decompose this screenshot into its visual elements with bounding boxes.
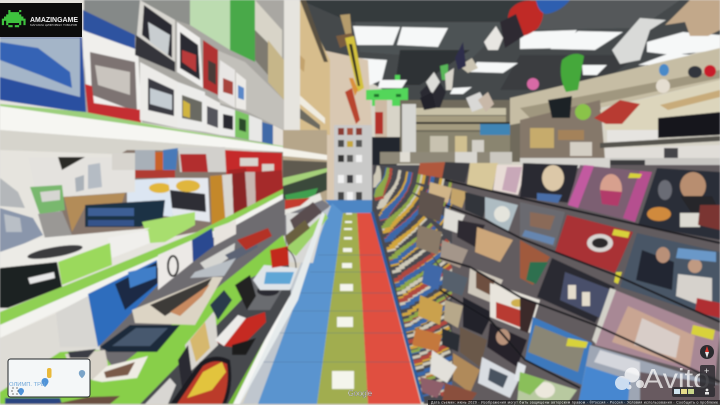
avito: dots xyxy=(615,368,644,390)
plush: cream xyxy=(445,68,454,90)
box: red set xyxy=(178,147,228,172)
cardboard box xyxy=(64,193,125,232)
minimap: pin 3 xyxy=(18,388,24,396)
white panel xyxy=(56,296,97,347)
dark blue boxes xyxy=(85,200,165,227)
cover: red rap xyxy=(555,215,633,273)
cover: bottom silver xyxy=(578,345,720,404)
barcode box xyxy=(108,230,150,258)
green invader sign xyxy=(366,75,408,106)
blue console box xyxy=(88,260,158,347)
floor level xyxy=(236,200,421,404)
plush: green yellow ball xyxy=(575,104,591,120)
plush: black hat xyxy=(688,66,702,78)
box: controller small xyxy=(218,60,235,108)
black box xyxy=(0,262,62,308)
top back boxes xyxy=(84,0,140,40)
end cap and green lower shelf xyxy=(226,212,328,404)
plush: pink xyxy=(527,78,539,90)
white blue box xyxy=(253,265,298,290)
floor: grey base xyxy=(236,205,332,404)
box: console mario xyxy=(127,178,173,217)
plush: grey figure xyxy=(459,58,478,73)
cover: dark navy xyxy=(537,258,615,323)
plush: dark bundle xyxy=(548,96,572,118)
attribution bar xyxy=(428,400,720,405)
controller pack xyxy=(0,208,43,252)
lower wall xyxy=(0,300,100,392)
plush: green small xyxy=(440,64,448,80)
floor: red strip xyxy=(357,213,421,404)
controls: thumbnails xyxy=(674,389,694,394)
dense narrow covers xyxy=(372,165,452,404)
plush: red small xyxy=(704,65,716,77)
right upper wall xyxy=(510,48,720,168)
box: controller dark xyxy=(205,95,220,135)
second level products xyxy=(0,147,285,308)
controls: plus: + xyxy=(704,366,709,376)
lower shelf products xyxy=(5,202,322,404)
shelf lines on disc wall xyxy=(440,180,720,388)
top shelf boxes xyxy=(0,0,284,147)
green item xyxy=(30,185,65,215)
green strip items xyxy=(210,290,232,320)
cover: blonde woman xyxy=(520,163,578,203)
plush: white cat xyxy=(656,79,670,93)
floor: tile seams xyxy=(262,255,420,362)
plush: white cluster xyxy=(466,92,488,112)
logo: wordmark: AMAZINGAME xyxy=(30,15,78,24)
logo: green invader xyxy=(2,10,26,27)
dark book xyxy=(100,325,180,352)
box: green xyxy=(235,110,249,140)
large covers xyxy=(517,163,720,404)
logo: tagline: МАГАЗИН ЦИФРОВЫХ ТОВАРОВ xyxy=(30,23,77,27)
box: red cluster xyxy=(225,150,282,205)
plush: red monster xyxy=(508,1,543,36)
cover: pink lady xyxy=(567,165,652,222)
emblem shield xyxy=(170,356,231,404)
box: white controller 2 xyxy=(140,62,178,128)
wall items on back xyxy=(290,202,322,234)
controls: layer panel xyxy=(672,387,715,397)
plush: green turtle xyxy=(561,54,584,92)
back pegboard with merchandise xyxy=(334,125,372,201)
plush: dark hanging xyxy=(455,42,466,70)
cover: dark cast xyxy=(520,202,565,247)
plush: dark bottom xyxy=(420,92,436,110)
minimap xyxy=(8,359,90,397)
floor: green strip xyxy=(317,213,368,404)
ceiling lights xyxy=(353,26,720,94)
box: red controller small xyxy=(177,22,203,88)
second level backdrop xyxy=(60,150,285,250)
wall base blue line xyxy=(372,212,423,402)
blue box behind xyxy=(192,228,214,262)
red device xyxy=(270,246,289,268)
controls: person xyxy=(705,389,709,394)
cover: mauve xyxy=(592,288,720,377)
minimap: pin 2 xyxy=(79,370,85,378)
cover: green white xyxy=(517,372,577,404)
controls: compass xyxy=(700,345,714,359)
tan box xyxy=(132,277,223,325)
cover: colourful left xyxy=(520,240,550,285)
minimap: pegman xyxy=(47,368,52,378)
green side box xyxy=(58,243,112,285)
sword decoration xyxy=(336,14,364,124)
ceiling xyxy=(305,0,720,101)
box: controller yellow xyxy=(178,82,205,132)
white o box xyxy=(158,240,193,290)
white flat box xyxy=(0,228,150,272)
back wall cream xyxy=(322,50,372,205)
cover: small red xyxy=(520,297,537,333)
pale green box xyxy=(142,212,195,243)
avito: wordmark: Avito xyxy=(643,363,710,394)
disc wall base xyxy=(372,165,720,404)
minimap: place label: ОЛИМП. ТРЦ xyxy=(9,382,46,388)
floor: back band xyxy=(325,200,375,217)
cover: group xyxy=(614,233,720,320)
plush: blue monster xyxy=(536,0,570,14)
upper left beige shelving xyxy=(299,0,330,136)
map controls xyxy=(672,345,715,397)
plush: colored bundle 1 xyxy=(594,100,640,124)
controls: zoom panel xyxy=(700,365,715,387)
cover: blue landscape xyxy=(525,317,592,385)
minimap: pin 1 xyxy=(42,378,48,387)
right display shelves at the back xyxy=(400,100,530,162)
plush: white dragon xyxy=(612,18,666,64)
plush: dark figure xyxy=(500,14,524,48)
white shelf with posters xyxy=(145,378,176,404)
logo badge xyxy=(0,3,82,37)
box: red side xyxy=(203,40,218,95)
box: verticals xyxy=(210,175,226,234)
hanging plush toys xyxy=(420,0,720,124)
space between shelves backdrop xyxy=(98,198,285,385)
minimap: expand icon xyxy=(12,388,18,394)
plush: white figure xyxy=(484,26,503,50)
top strip of goods on right wall xyxy=(380,152,610,168)
cover: man portrait xyxy=(638,168,720,240)
attribution: text: Дата съемки: июнь 2020 · Изображения могут быть защищены авторским правом · ©Россия · Россия · Условия использования · Сообщить о проблеме xyxy=(431,401,718,405)
black speaker xyxy=(235,275,285,310)
dark rack at the back xyxy=(371,98,401,166)
below third shelf backdrop xyxy=(140,252,291,404)
plush: dark group xyxy=(420,83,446,108)
small boxes xyxy=(200,243,235,273)
top box backdrop xyxy=(84,0,284,147)
plush: white small group xyxy=(426,72,440,94)
box: blue controller xyxy=(0,37,86,113)
box: small row xyxy=(249,115,262,142)
shelf 2 green xyxy=(0,188,285,338)
box: controller black xyxy=(220,105,235,137)
shelf 1 xyxy=(0,104,283,160)
google label: Google xyxy=(348,389,373,398)
third shelf green top xyxy=(0,235,288,404)
bottom books xyxy=(5,398,62,404)
back shelves corridor left xyxy=(283,130,330,248)
white console box xyxy=(28,157,135,197)
floor: white tiles xyxy=(332,213,354,389)
guitar xyxy=(217,312,266,348)
medium covers xyxy=(412,162,540,403)
box: white controller 1 xyxy=(135,0,175,72)
book stack xyxy=(92,356,148,382)
plush: blue small xyxy=(659,64,669,76)
plastic wrap xyxy=(0,178,25,208)
box: red controller xyxy=(82,30,142,123)
avito watermark xyxy=(615,363,710,394)
floor: blue strip xyxy=(258,203,343,404)
left upper wall xyxy=(0,0,300,340)
plush: tan legs xyxy=(665,0,720,36)
